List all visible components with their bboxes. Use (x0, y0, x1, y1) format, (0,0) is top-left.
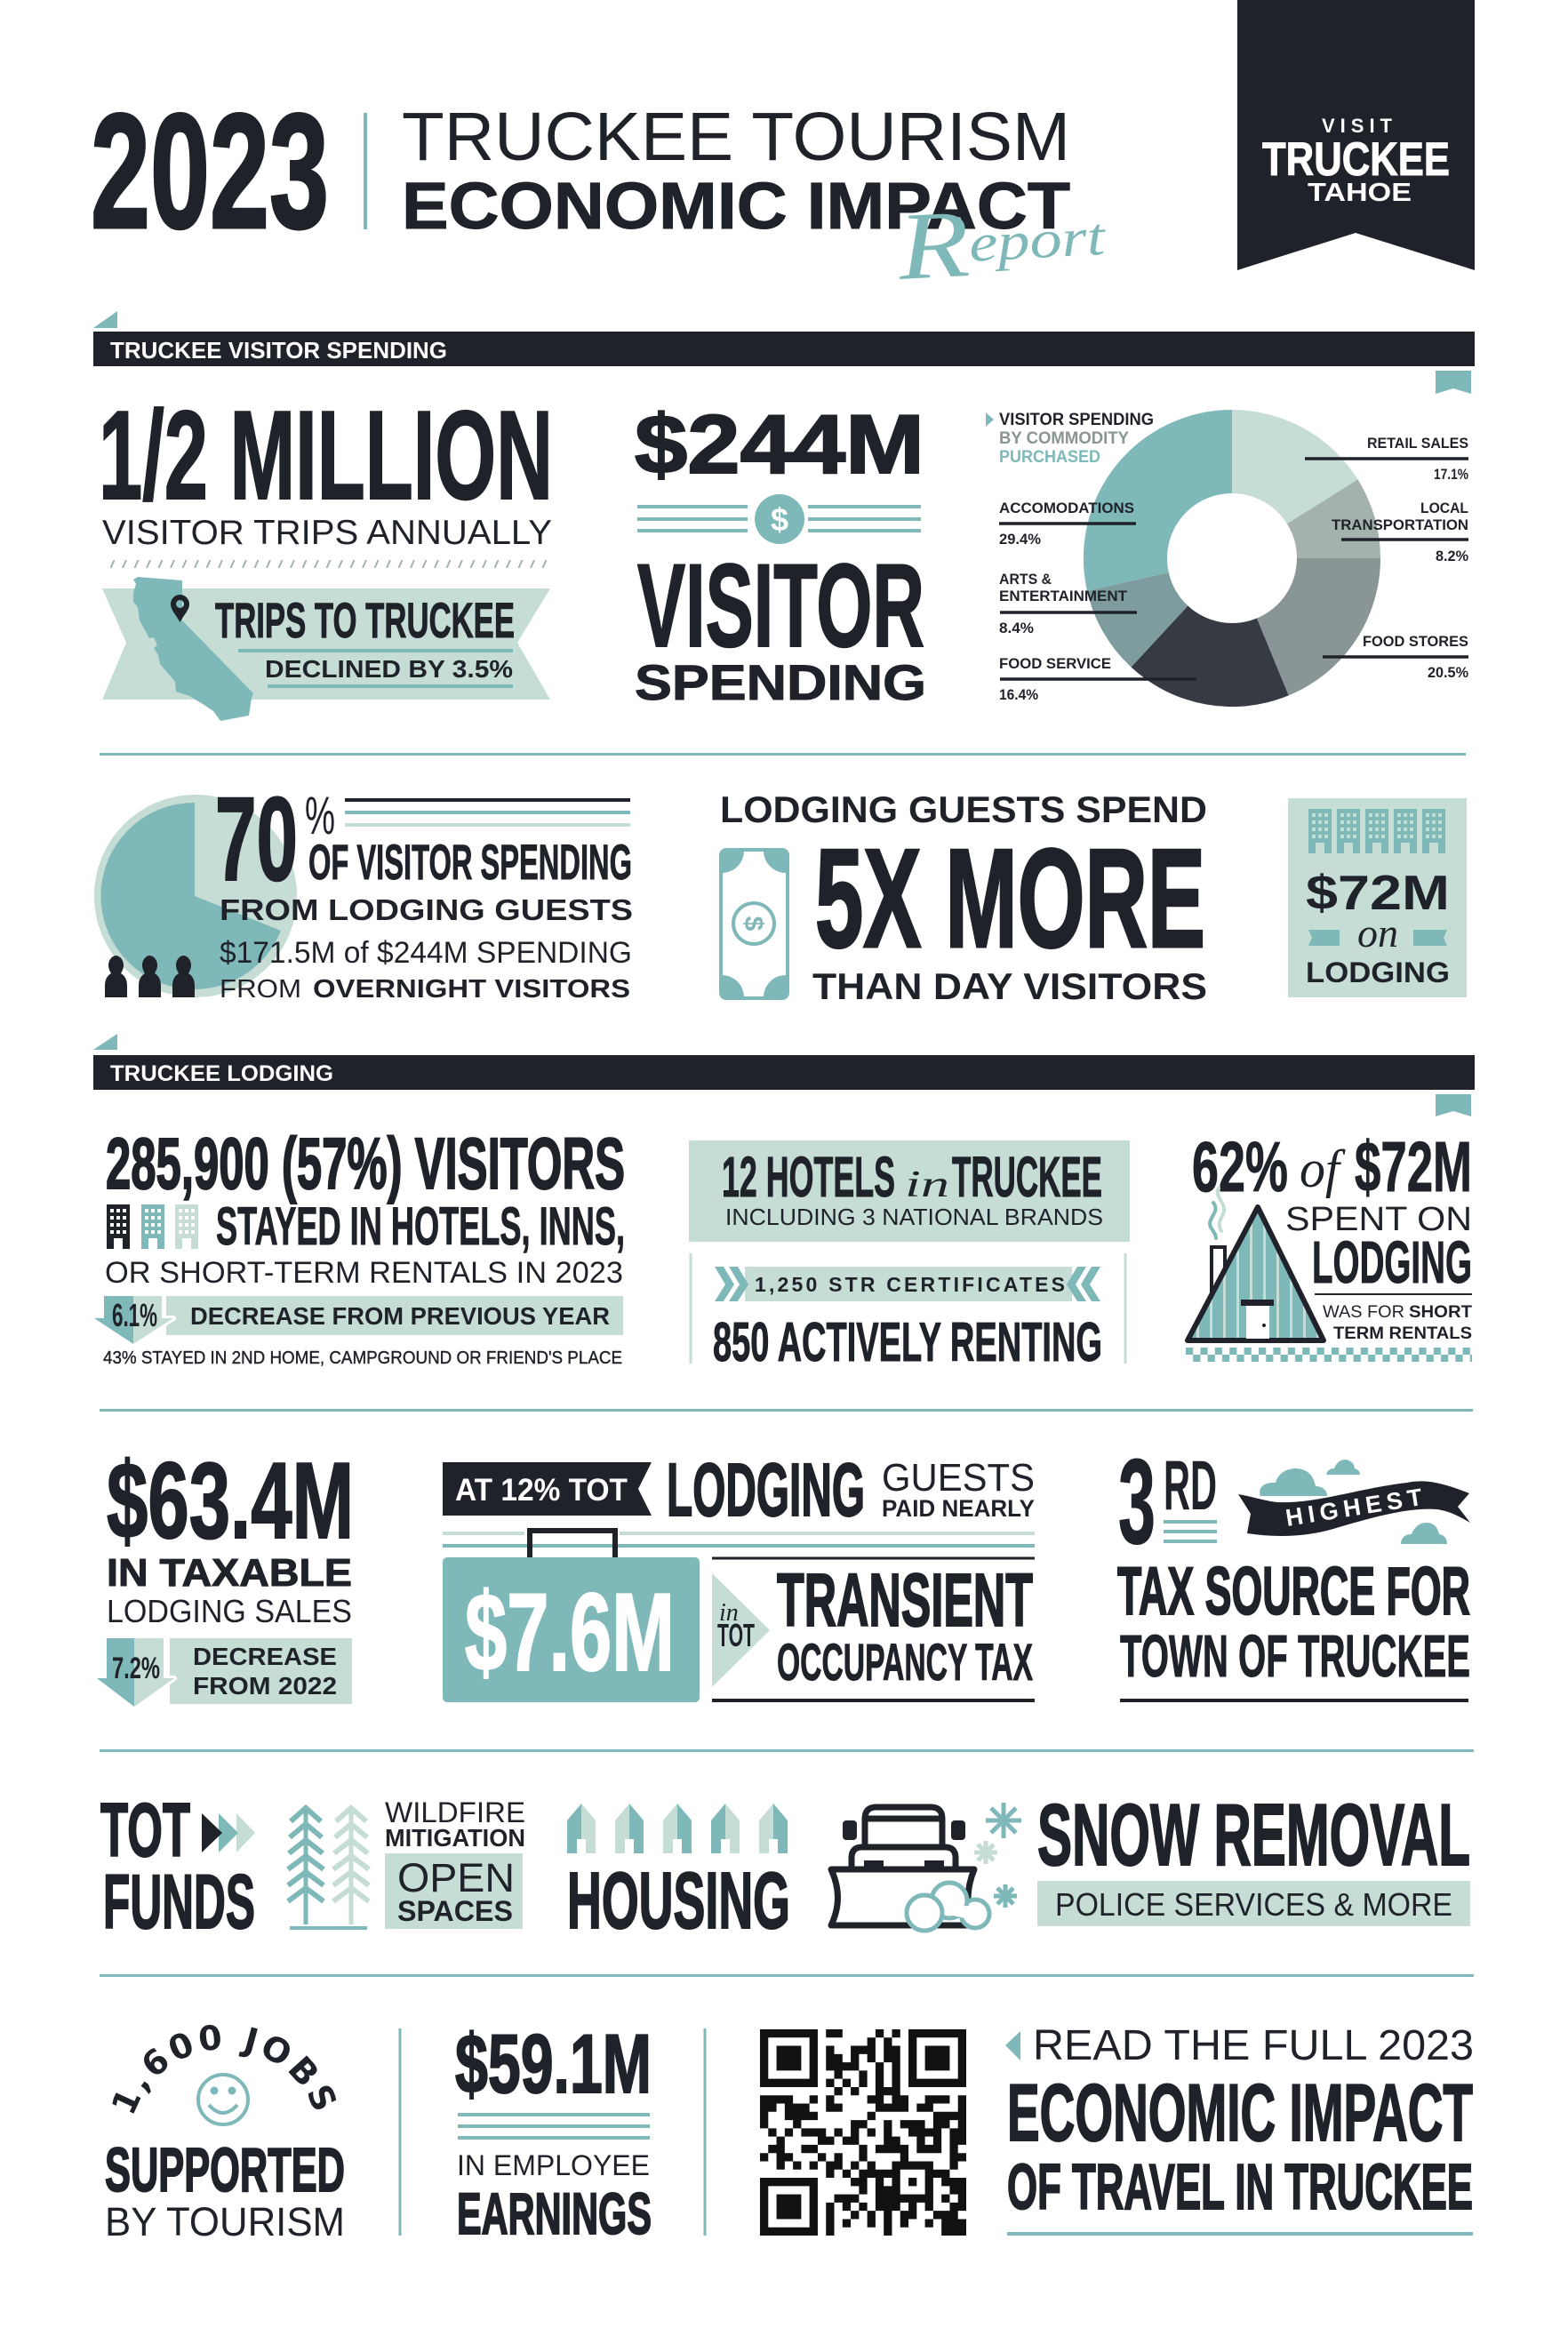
chevrons (202, 1813, 255, 1852)
script on: on (1357, 910, 1398, 956)
icon: hotels (1308, 809, 1445, 853)
icon: people (105, 956, 195, 997)
spending: SPENDING (635, 654, 926, 710)
actively renting: 850 ACTIVELY RENTING (713, 1312, 1102, 1373)
spending detail: $171.5M of $244M SPENDING (220, 936, 632, 970)
chart labels: BY COMMODITY (999, 429, 1129, 448)
arc text: 1,600 JOBS (112, 2025, 336, 2114)
earnings: EARNINGS (457, 2180, 652, 2246)
donut chart (1084, 410, 1380, 707)
certificates text: 1,250 STR CERTIFICATES (755, 1273, 1065, 1296)
chart labels: 16.4% (999, 686, 1038, 703)
spent on: SPENT ON (1285, 1201, 1472, 1238)
tag (443, 1462, 652, 1516)
header (91, 79, 1108, 300)
QR code (760, 2029, 966, 2236)
paid nearly: PAID NEARLY (882, 1495, 1035, 1522)
lodging: LODGING (667, 1448, 865, 1532)
headline: 285,900 (57%) VISITORS (106, 1124, 625, 1204)
of visitor spending: OF VISITOR SPENDING (308, 834, 632, 890)
triangle (712, 1573, 770, 1687)
ribbon (102, 588, 550, 700)
ribbon (1238, 1481, 1470, 1536)
logo TAHOE: TAHOE (1308, 179, 1412, 207)
script Report: R (895, 191, 972, 300)
5x more: 5X MORE (815, 820, 1205, 977)
section title: TRUCKEE LODGING (110, 1061, 333, 1086)
panel: housing (567, 1804, 790, 1946)
tag text: AT 12% TOT (455, 1473, 628, 1508)
icon: smile (198, 2075, 248, 2124)
term rentals: TERM RENTALS (1333, 1324, 1472, 1343)
chart labels: 8.2% (1436, 548, 1468, 564)
transient: TRANSIENT (777, 1558, 1033, 1642)
icon: dollar coin (755, 494, 804, 544)
icon: briefcase (443, 1531, 700, 1702)
icon: snowflakes (974, 1803, 1021, 1908)
$72M: $72M (1355, 1127, 1472, 1206)
from: FROM (220, 975, 301, 1004)
amount: $59.1M (455, 2017, 652, 2110)
decrease text: DECREASE FROM PREVIOUS YEAR (190, 1302, 610, 1330)
chart labels: FOOD SERVICE (999, 655, 1111, 672)
panel: half million trips (99, 385, 553, 721)
amount: $72M (1306, 865, 1450, 920)
title line two: ECONOMIC IMPACT (402, 169, 1070, 243)
supported: SUPPORTED (105, 2135, 345, 2204)
lodging guests spend: LODGING GUESTS SPEND (720, 788, 1207, 830)
lodging sales: LODGING SALES (107, 1593, 352, 1629)
panel: third highest (1117, 1434, 1470, 1700)
visitor: VISITOR (637, 540, 924, 672)
in taxable: IN TAXABLE (107, 1551, 352, 1595)
panel: read the report (1005, 2022, 1474, 2234)
70: 70 (215, 773, 298, 906)
icon: california (133, 577, 253, 721)
occupancy tax: OCCUPANCY TAX (777, 1634, 1033, 1692)
by tourism: BY TOURISM (105, 2199, 345, 2244)
panel: taxable sales (97, 1440, 354, 1707)
declined: DECLINED BY 3.5% (265, 655, 513, 683)
from 2022: FROM 2022 (193, 1672, 337, 1700)
icon: plow (831, 1807, 974, 1925)
checker base (1186, 1348, 1472, 1362)
headline: 1/2 MILLION (99, 385, 553, 526)
spaces: SPACES (397, 1895, 513, 1927)
footnote: 43% STAYED IN 2ND HOME, CAMPGROUND OR FRIEND'S PLACE (103, 1348, 622, 1368)
coin symbol: $ (771, 501, 788, 538)
panel: 5x more (719, 788, 1207, 1007)
open: OPEN (397, 1855, 515, 1900)
short: SHORT (1409, 1303, 1472, 1322)
short-term: OR SHORT-TERM RENTALS IN 2023 (105, 1256, 623, 1290)
icon: a-frame (1188, 1188, 1324, 1340)
script in: in (719, 1599, 739, 1627)
header divider (364, 113, 367, 229)
icon: bill (719, 848, 789, 1000)
panel: jobs (105, 2025, 345, 2244)
chart labels: ENTERTAINMENT (999, 588, 1128, 604)
6.1: 6.1% (112, 1297, 157, 1333)
panel: $244M visitor spending (635, 397, 926, 710)
section title: TRUCKEE VISITOR SPENDING (110, 337, 447, 364)
truckee: TRUCKEE (952, 1145, 1102, 1209)
panel: transient occupancy tax (443, 1448, 1035, 1702)
panel: snow removal (831, 1786, 1470, 1931)
housing: HOUSING (567, 1857, 790, 1946)
3: 3 (1118, 1434, 1156, 1569)
script Report: eport (967, 207, 1108, 273)
subhead: VISITOR TRIPS ANNUALLY (102, 514, 552, 552)
chart labels: FOOD STORES (1363, 633, 1468, 650)
wildfire: WILDFIRE (385, 1796, 525, 1828)
icon: trees (288, 1808, 369, 1930)
stayed in: STAYED IN HOTELS, INNS, (216, 1196, 625, 1256)
chart title: VISITOR SPENDING (999, 411, 1154, 429)
arrow (97, 1638, 174, 1707)
icon: clouds (1260, 1460, 1447, 1544)
decrease box (166, 1296, 623, 1335)
highest: HIGHEST (1284, 1484, 1425, 1532)
icon: pin (171, 595, 189, 622)
decrease: DECREASE (193, 1643, 337, 1670)
icon: snow pile (907, 1883, 989, 1931)
panel: hotels and STR (689, 1140, 1130, 1373)
panel: 62 percent (1186, 1127, 1472, 1362)
from lodging guests: FROM LODGING GUESTS (220, 893, 633, 926)
overnight visitors: OVERNIGHT VISITORS (313, 975, 630, 1004)
chart labels: ARTS & (999, 571, 1052, 588)
script of: of (1300, 1140, 1346, 1198)
panel: TOT funds (100, 1788, 525, 1945)
divider lines (637, 507, 921, 531)
section bar: lodging (93, 1034, 1475, 1116)
icon: buildings (107, 1204, 198, 1249)
read the full: READ THE FULL 2023 (1033, 2022, 1474, 2069)
year: 2023 (91, 79, 329, 262)
tot: TOT (100, 1788, 190, 1873)
lodging: LODGING (1306, 956, 1450, 988)
amount: $7.6M (465, 1572, 675, 1694)
pie chart (94, 795, 297, 997)
icon: houses (567, 1804, 788, 1853)
tot: TOT (717, 1617, 755, 1653)
chart labels: 29.4% (999, 531, 1041, 548)
chart labels: TRANSPORTATION (1332, 516, 1468, 533)
was for: WAS FOR (1323, 1303, 1404, 1322)
panel: $72M on lodging (1288, 798, 1467, 997)
title line one: TRUCKEE TOURISM (402, 99, 1070, 175)
certificates ribbon (715, 1267, 1100, 1301)
chart labels: 20.5% (1428, 664, 1468, 681)
panel: earnings (455, 2017, 652, 2246)
guests: GUESTS (882, 1456, 1035, 1500)
panel: 70 percent (94, 773, 633, 1004)
trips to truckee: TRIPS TO TRUCKEE (215, 592, 515, 648)
icon: bill: $ (739, 916, 768, 932)
7.2: 7.2% (112, 1652, 160, 1685)
section bar: visitor spending (93, 311, 1475, 394)
logo VISIT: VISIT (1322, 115, 1393, 137)
national brands: INCLUDING 3 NATIONAL BRANDS (725, 1204, 1103, 1230)
funds: FUNDS (103, 1860, 255, 1945)
12 hotels: 12 HOTELS (722, 1145, 895, 1209)
62%: 62% (1192, 1127, 1288, 1206)
chart labels: 8.4% (999, 620, 1034, 636)
logo banner (1237, 0, 1475, 270)
arrow (94, 1296, 173, 1344)
in employee: IN EMPLOYEE (457, 2149, 650, 2181)
logo TRUCKEE: TRUCKEE (1262, 133, 1450, 186)
panel: 285,900 visitors (94, 1124, 625, 1368)
rd: RD (1164, 1445, 1217, 1524)
amount: $244M (635, 397, 924, 491)
chart labels: ACCOMODATIONS (999, 500, 1134, 516)
chart labels: RETAIL SALES (1367, 435, 1468, 452)
script in: in (905, 1164, 949, 1205)
chart labels: LOCAL (1420, 500, 1468, 516)
police services: POLICE SERVICES & MORE (1055, 1886, 1452, 1923)
mitigation: MITIGATION (385, 1824, 525, 1852)
than day visitors: THAN DAY VISITORS (812, 965, 1207, 1007)
chart labels: PURCHASED (999, 448, 1100, 467)
amount: $63.4M (107, 1440, 354, 1561)
chart labels (986, 411, 1468, 703)
chart labels: 17.1% (1434, 466, 1468, 483)
percent: % (305, 786, 335, 845)
